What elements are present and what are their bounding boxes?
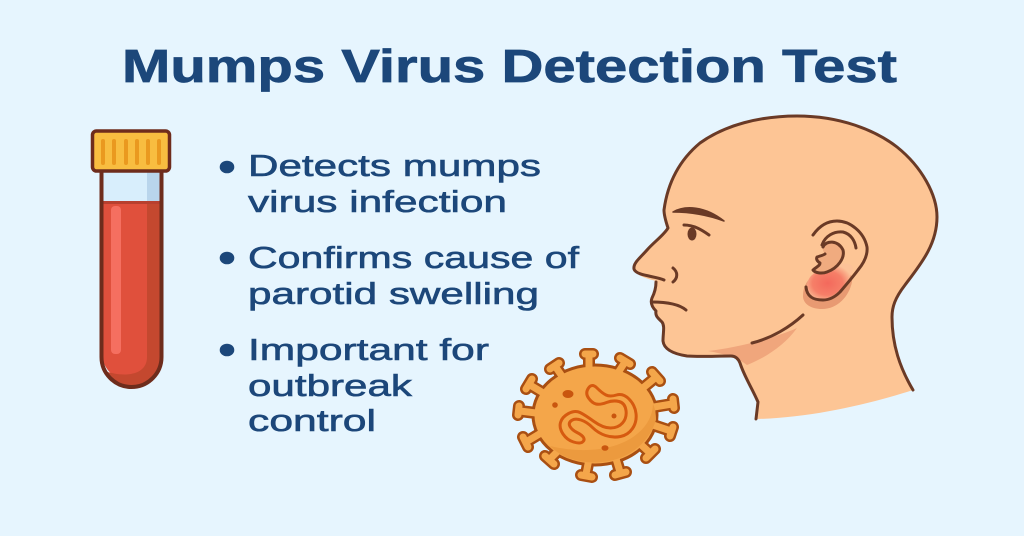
bullet: important: outbreak (248, 368, 413, 403)
bullet: important (220, 332, 489, 438)
eye (684, 225, 709, 240)
bullet: important: control (248, 403, 376, 438)
icon: head profile with swollen parotid (634, 116, 937, 419)
virus body shading (550, 404, 656, 462)
bullet: detects (220, 148, 541, 219)
bullet: detects: Detects mumps (248, 148, 541, 183)
title: Mumps Virus Detection Test (122, 40, 897, 92)
bullet: confirms (220, 240, 579, 311)
bullet: important: Important for (248, 332, 489, 367)
icon: blood test tube (92, 131, 170, 387)
icon: virus particle (518, 354, 674, 477)
bullet: detects: virus infection (248, 184, 507, 219)
bullet: confirms: Confirms cause of (248, 240, 579, 275)
nose and mouth lines (652, 268, 803, 343)
bullet list (220, 148, 579, 438)
jaw shadow (708, 328, 797, 365)
parotid swelling (803, 268, 852, 309)
bullet: confirms: parotid swelling (248, 276, 539, 311)
ear (806, 221, 867, 300)
eyebrow (673, 208, 724, 221)
virus genome squiggle (560, 386, 636, 443)
head outline (651, 282, 758, 419)
